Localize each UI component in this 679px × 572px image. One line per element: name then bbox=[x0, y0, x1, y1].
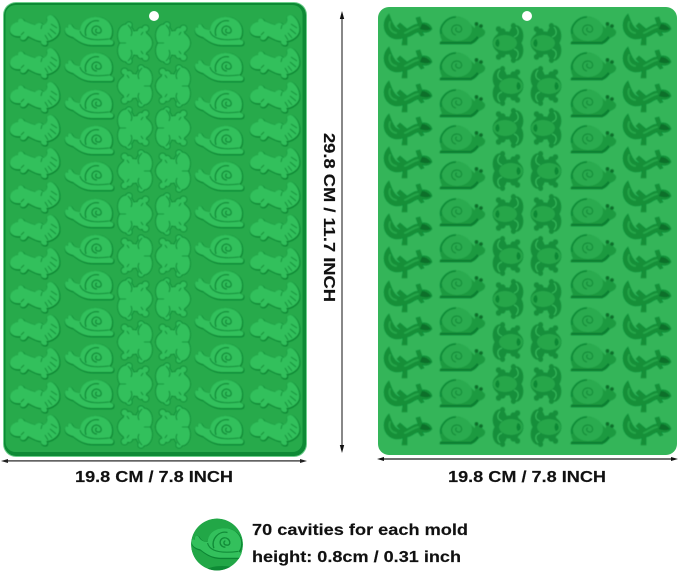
right mold cavities bbox=[384, 14, 671, 447]
label: left width: 19.8 CM / 7.8 INCH bbox=[75, 469, 233, 486]
panel: left mold bbox=[3, 2, 307, 457]
left mold cavities bbox=[10, 15, 300, 448]
arrow: right mold width bbox=[377, 457, 678, 461]
label: height: 29.8 CM / 11.7 INCH bbox=[320, 133, 337, 302]
text: cavity count: 70 cavities for each mold bbox=[252, 522, 468, 539]
left mold hanging hole bbox=[149, 11, 159, 21]
icon: snail cavity circle bbox=[191, 518, 243, 572]
arrow: mold height bbox=[340, 11, 344, 453]
arrow: left mold width bbox=[1, 459, 307, 463]
right mold hanging hole bbox=[522, 11, 532, 21]
panel: right mold bbox=[378, 7, 677, 455]
label: right width: 19.8 CM / 7.8 INCH bbox=[448, 469, 606, 486]
text: cavity height: height: 0.8cm / 0.31 inch bbox=[252, 549, 461, 566]
